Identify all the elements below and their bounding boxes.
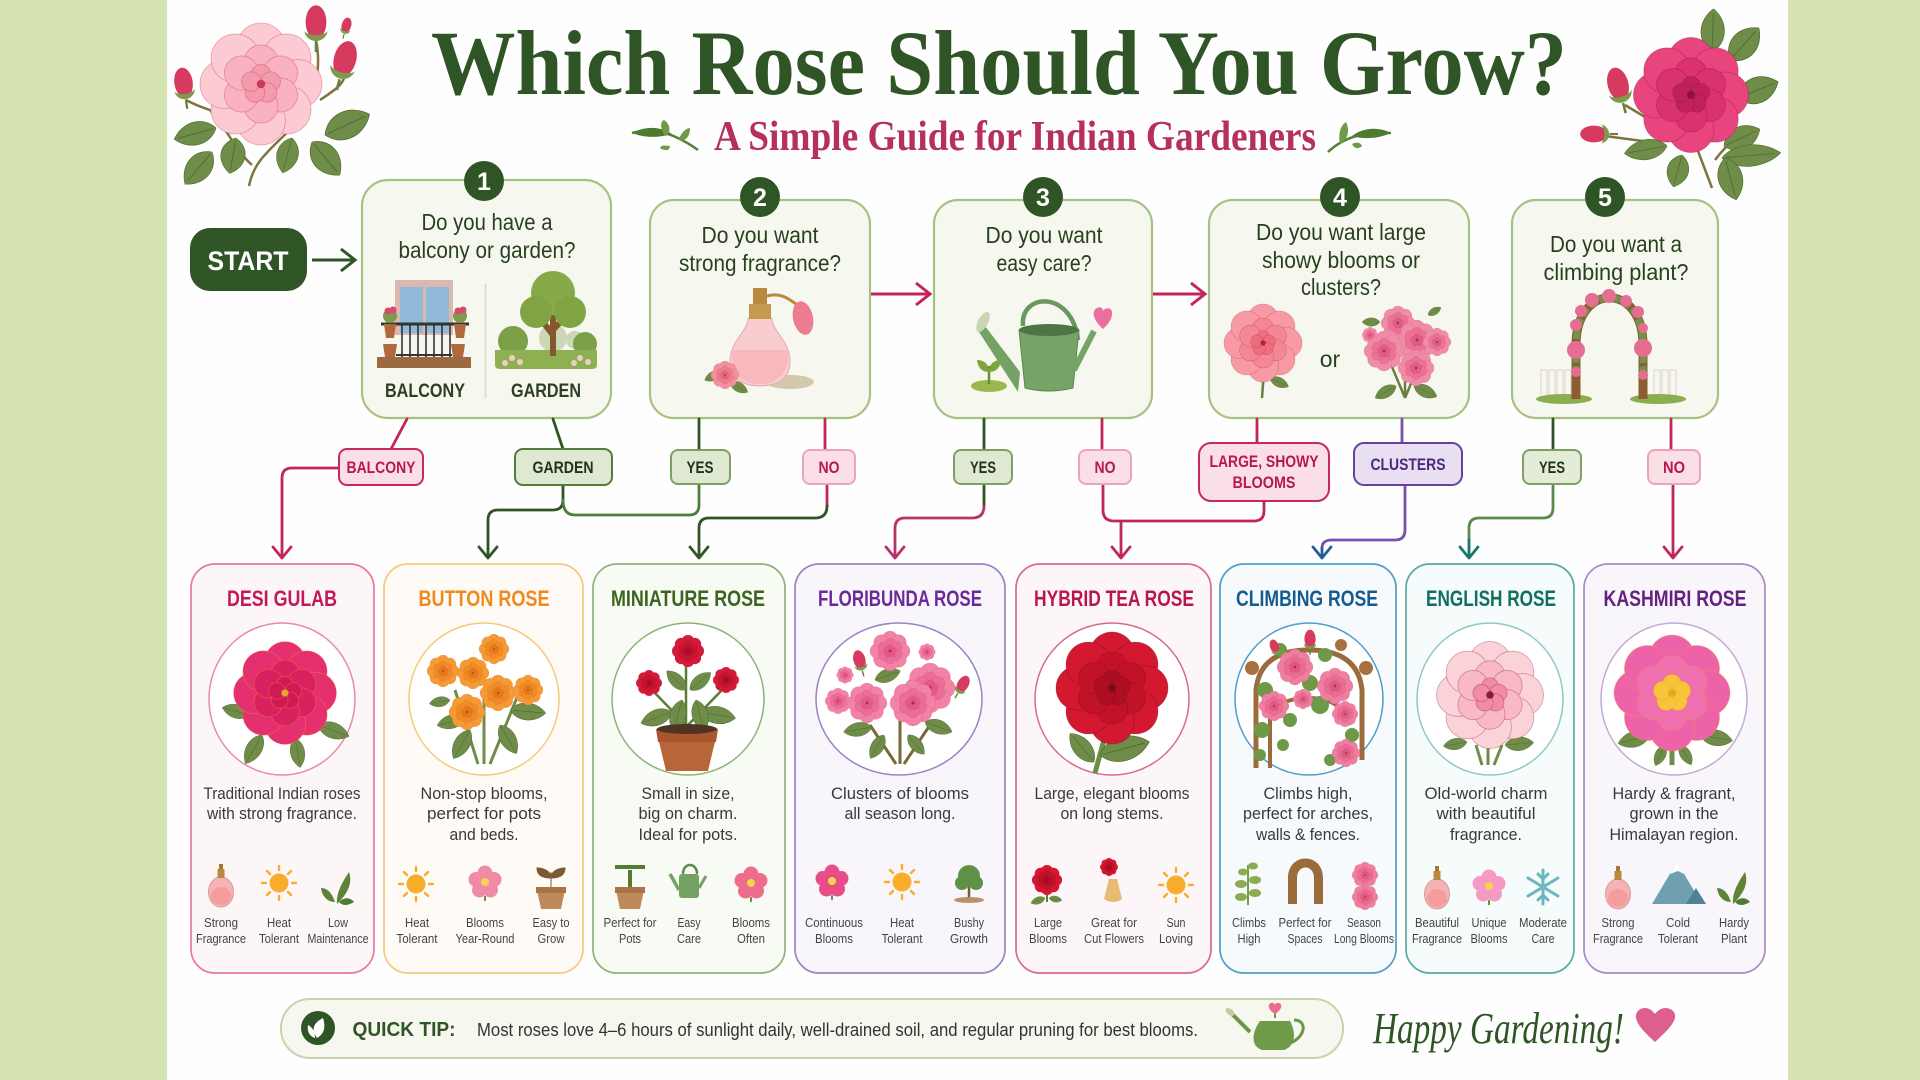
question text	[679, 222, 841, 276]
panel: quick tip	[281, 999, 1343, 1058]
card title: HYBRID TEA ROSE	[1034, 586, 1194, 611]
pill: no, question 3: NO	[1094, 458, 1116, 477]
photo circle	[612, 623, 764, 775]
arrow: question 3 to 4	[1153, 283, 1205, 305]
feature labels: Blooms	[815, 932, 853, 946]
badge 5	[1585, 177, 1625, 217]
feature labels: Climbs	[1232, 916, 1266, 930]
description: with strong fragrance.	[206, 805, 357, 823]
feature labels: Often	[737, 932, 765, 946]
badge 2: 2	[753, 184, 767, 212]
feature labels: Tolerant	[1658, 932, 1698, 946]
feature icons	[1235, 858, 1378, 910]
description: all season long.	[844, 805, 956, 823]
illustration: deep pink rose, top right	[1580, 8, 1783, 203]
panel: Miniature Rose	[593, 564, 785, 973]
pill: large, showy blooms: LARGE, SHOWY	[1210, 452, 1319, 471]
description: with beautiful	[1435, 805, 1536, 823]
feature labels	[1232, 916, 1394, 946]
description: Ideal for pots.	[638, 826, 738, 844]
feature icons	[1606, 862, 1750, 909]
badge 5: 5	[1598, 184, 1612, 212]
feature labels	[604, 916, 770, 946]
feature labels: Hardy	[1719, 916, 1750, 930]
subtitle: A Simple Guide for Indian Gardeners	[714, 114, 1316, 160]
description	[1243, 785, 1373, 844]
feature labels: Spaces	[1288, 932, 1322, 946]
question text: Do you want a	[1550, 231, 1682, 257]
pill: yes, question 3	[954, 450, 1012, 484]
pill: yes, question 2	[671, 450, 730, 484]
icon: rose arch	[1536, 289, 1686, 404]
feature labels: Care	[677, 932, 701, 946]
card title: ENGLISH ROSE	[1426, 586, 1556, 611]
feature icons	[615, 865, 768, 909]
card title: KASHMIRI ROSE	[1604, 586, 1746, 611]
feature labels: Strong	[204, 916, 238, 930]
option labels: GARDEN	[511, 381, 581, 402]
pill: clusters	[1354, 443, 1462, 485]
tip text: Most roses love 4–6 hours of sunlight daily, well-drained soil, and regular pruning for best blooms.	[477, 1020, 1198, 1040]
feature labels	[396, 916, 570, 946]
description: Climbs high,	[1264, 785, 1352, 803]
feature labels: Easy to	[532, 916, 570, 930]
card title: CLIMBING ROSE	[1236, 586, 1378, 611]
pill: yes, question 5: YES	[1539, 458, 1565, 477]
card title: MINIATURE ROSE	[611, 586, 765, 611]
description	[1034, 785, 1190, 823]
icon: balcony	[377, 280, 471, 368]
photo circle	[1601, 623, 1747, 775]
description: Non-stop blooms,	[420, 785, 548, 803]
feature labels: Cut Flowers	[1084, 932, 1144, 946]
feature labels	[196, 916, 369, 946]
sign-off text: Happy Gardening!	[1372, 1004, 1624, 1053]
card title: DESI GULAB	[227, 586, 337, 611]
icon: left sprig	[632, 120, 698, 150]
icon: right sprig	[1328, 122, 1391, 152]
feature labels: Blooms	[466, 916, 504, 930]
feature labels	[1412, 916, 1567, 946]
feature labels: Cold	[1666, 916, 1690, 930]
feature labels: Perfect for	[604, 916, 656, 930]
badge 3: 3	[1036, 184, 1050, 212]
icon: garden tree	[495, 271, 597, 369]
start button	[190, 228, 307, 291]
question text: Do you want	[702, 222, 819, 248]
panel: English Rose	[1406, 564, 1574, 973]
description: Old-world charm	[1424, 785, 1548, 803]
feature labels: Heat	[890, 916, 914, 930]
photo circle	[209, 623, 355, 775]
feature labels: Loving	[1159, 932, 1193, 946]
icon: leaf badge	[301, 1011, 335, 1045]
feature icons	[1424, 866, 1558, 909]
description	[831, 785, 969, 823]
feature labels	[1029, 916, 1193, 946]
pill: balcony: BALCONY	[346, 458, 416, 477]
description	[204, 785, 360, 823]
icon: large rose	[1224, 304, 1302, 398]
panel: Climbing Rose	[1220, 564, 1396, 973]
feature labels: Blooms	[732, 916, 770, 930]
description	[1424, 785, 1548, 844]
feature icons	[399, 866, 566, 909]
option labels: BALCONY	[385, 381, 465, 402]
card title: FLORIBUNDA ROSE	[818, 586, 982, 611]
badge 4	[1320, 177, 1360, 217]
pill: no, question 2	[803, 450, 855, 484]
pill: no, question 5	[1648, 450, 1700, 484]
feature labels: Heat	[267, 916, 291, 930]
arrow: start to question 1	[312, 249, 355, 271]
feature labels: Season	[1347, 916, 1381, 930]
question text	[1256, 219, 1426, 300]
badge 3	[1023, 177, 1063, 217]
pill: yes, question 2: YES	[686, 458, 714, 477]
feature icons	[1030, 858, 1193, 906]
pill: clusters: CLUSTERS	[1370, 455, 1446, 474]
icon: watering can with heart	[1224, 1003, 1303, 1050]
feature labels: Plant	[1721, 932, 1747, 946]
pill: garden: GARDEN	[532, 458, 594, 477]
pill: yes, question 5	[1523, 450, 1581, 484]
feature labels: Low	[328, 916, 349, 930]
badge 1	[464, 161, 504, 201]
description: Hardy & fragrant,	[1612, 785, 1736, 803]
feature labels: Beautiful	[1415, 916, 1459, 930]
feature labels	[1593, 916, 1750, 946]
icon: heart	[1636, 1008, 1675, 1042]
description: Small in size,	[642, 785, 734, 803]
feature labels: Year-Round	[456, 932, 515, 946]
badge 4: 4	[1333, 184, 1347, 212]
question text	[1544, 231, 1688, 285]
description: perfect for arches,	[1243, 805, 1373, 823]
feature labels: Tolerant	[259, 932, 299, 946]
description	[1610, 785, 1738, 844]
pill: no, question 5: NO	[1663, 458, 1685, 477]
question text: balcony or garden?	[398, 237, 576, 263]
icon: perfume bottle	[703, 288, 816, 396]
description: on long stems.	[1060, 805, 1164, 823]
question text: showy blooms or	[1262, 247, 1420, 273]
divider	[484, 284, 486, 398]
question text: strong fragrance?	[679, 250, 841, 276]
feature labels: Fragrance	[1593, 932, 1643, 946]
photo circle	[1035, 623, 1189, 775]
photo circle	[816, 623, 982, 775]
illustration: pale pink rose, top left	[171, 5, 375, 192]
text: or: or	[1320, 346, 1341, 372]
feature labels: Care	[1532, 932, 1555, 946]
title: Which Rose Should You Grow?	[431, 12, 1567, 114]
badge 1: 1	[477, 168, 491, 196]
description	[420, 785, 548, 844]
feature labels: Fragrance	[1412, 932, 1462, 946]
feature labels: Moderate	[1519, 916, 1567, 930]
feature labels: Heat	[405, 916, 429, 930]
icon: rose cluster	[1362, 304, 1451, 403]
feature labels: Pots	[619, 932, 641, 946]
question text: Do you have a	[422, 209, 553, 235]
feature labels: Grow	[538, 932, 565, 946]
feature labels: Maintenance	[308, 932, 369, 946]
feature labels: Growth	[950, 932, 988, 946]
pill: large, showy blooms	[1199, 443, 1329, 501]
question text: clusters?	[1301, 274, 1381, 300]
photo circle	[1235, 623, 1383, 775]
card title: BUTTON ROSE	[418, 586, 550, 611]
pill: garden	[515, 449, 612, 485]
feature labels: Tolerant	[882, 932, 923, 946]
pill: balcony	[339, 449, 423, 485]
panel: Floribunda Rose	[795, 564, 1005, 973]
feature labels: Strong	[1602, 916, 1635, 930]
feature labels	[805, 916, 988, 946]
panel: Button Rose	[384, 564, 583, 973]
panel: question 3	[934, 177, 1152, 418]
question text: climbing plant?	[1544, 259, 1688, 285]
feature labels: Large	[1034, 916, 1062, 930]
description: and beds.	[450, 826, 518, 844]
feature labels: Fragrance	[196, 932, 246, 946]
description: big on charm.	[638, 805, 738, 823]
pill: yes, question 3: YES	[970, 458, 996, 477]
feature labels: Tolerant	[396, 932, 438, 946]
icon: watering can	[971, 301, 1112, 392]
label: QUICK TIP:	[352, 1019, 456, 1041]
badge 2	[740, 177, 780, 217]
panel: question 4	[1209, 177, 1469, 418]
feature labels: Sun	[1166, 916, 1186, 930]
question text	[398, 209, 576, 263]
description: Himalayan region.	[1610, 826, 1738, 844]
option labels	[385, 381, 581, 402]
panel: question 1	[362, 161, 611, 418]
description: Traditional Indian roses	[204, 785, 360, 803]
pill: no, question 2: NO	[818, 458, 840, 477]
description: walls & fences.	[1255, 826, 1360, 844]
description: grown in the	[1630, 805, 1718, 823]
feature labels: Blooms	[1029, 932, 1067, 946]
flow connectors	[273, 419, 1682, 558]
description: Clusters of blooms	[831, 785, 969, 803]
feature icons	[208, 864, 354, 907]
panel: question 5	[1512, 177, 1718, 418]
pill: large, showy blooms: BLOOMS	[1232, 473, 1296, 492]
feature labels: Unique	[1472, 916, 1507, 930]
panel: Desi Gulab	[191, 564, 374, 973]
description: Large, elegant blooms	[1034, 785, 1190, 803]
feature icons	[816, 864, 984, 903]
feature labels: Great for	[1091, 916, 1137, 930]
feature labels: Perfect for	[1278, 916, 1332, 930]
description: fragrance.	[1450, 826, 1522, 844]
question text: Do you want large	[1256, 219, 1426, 245]
feature labels: Easy	[678, 916, 701, 930]
question text: Do you want	[986, 222, 1103, 248]
feature labels: Continuous	[805, 916, 863, 930]
photo circle	[409, 623, 559, 775]
question text: easy care?	[996, 250, 1092, 276]
description	[638, 785, 738, 844]
feature labels: Blooms	[1470, 932, 1508, 946]
panel: question 2	[650, 177, 870, 418]
panel: Kashmiri Rose	[1584, 564, 1765, 973]
photo circle	[1417, 623, 1563, 775]
feature labels: Bushy	[954, 916, 985, 930]
description: perfect for pots	[427, 805, 541, 823]
panel: Hybrid Tea Rose	[1016, 564, 1211, 973]
feature labels: High	[1238, 932, 1261, 946]
question text	[986, 222, 1103, 276]
arrow: question 2 to 3	[871, 283, 930, 305]
pill: no, question 3	[1079, 450, 1131, 484]
start button: START	[208, 246, 289, 276]
feature labels: Long Blooms	[1334, 932, 1394, 946]
